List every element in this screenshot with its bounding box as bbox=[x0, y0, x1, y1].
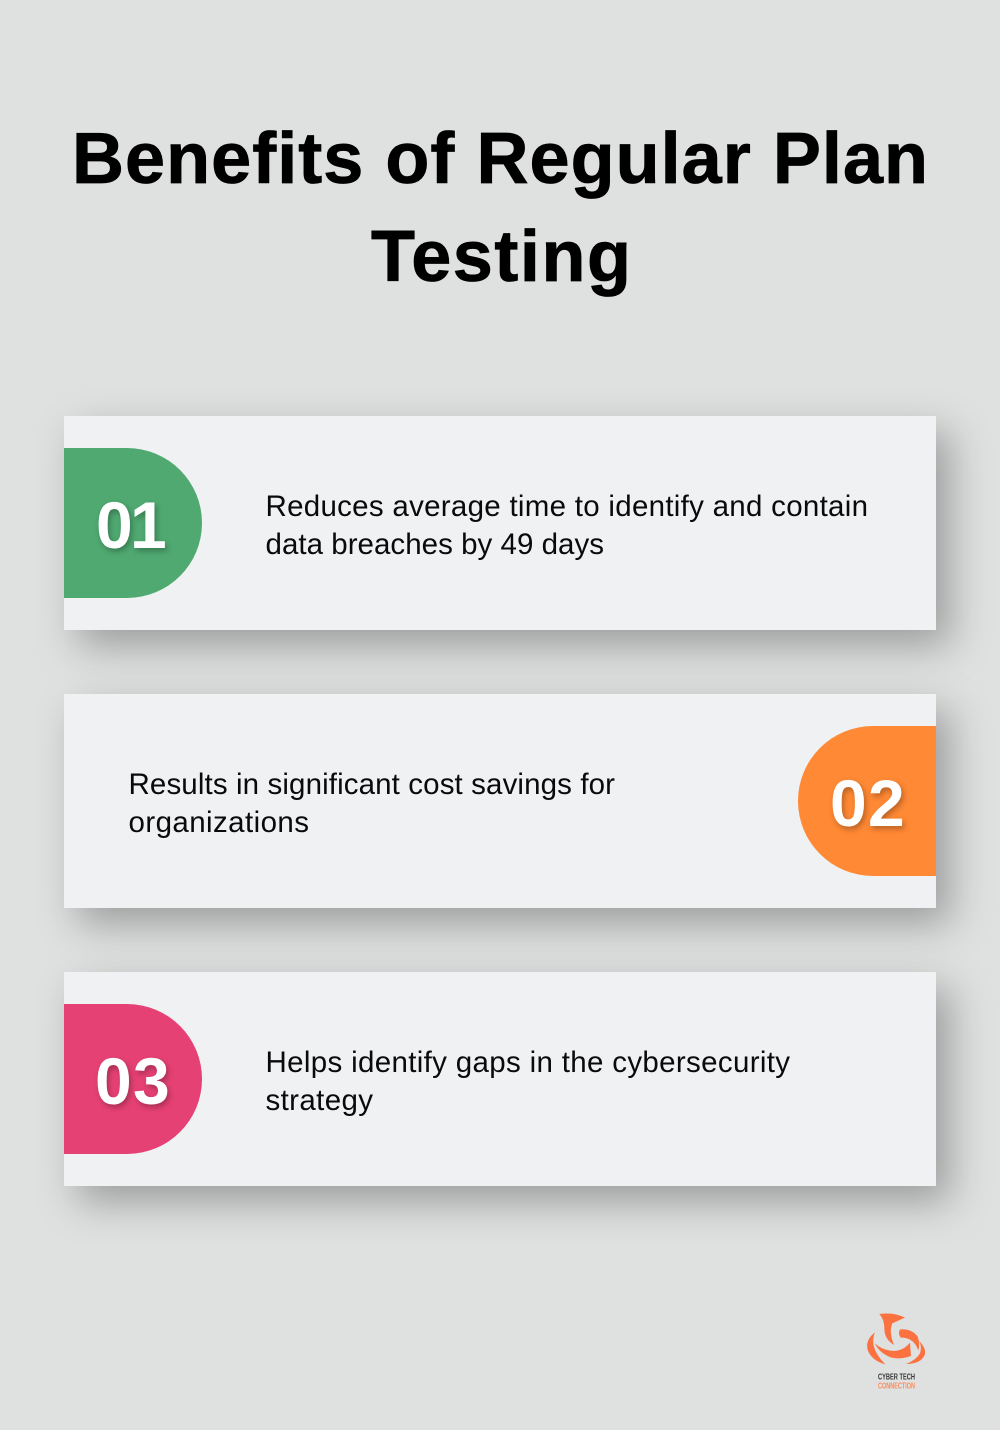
number badge 02 bbox=[798, 726, 936, 876]
panel: benefit 01 bbox=[64, 416, 936, 630]
logo wordmark: CONNECTION bbox=[878, 1382, 915, 1390]
title: Benefits of Regular Plan bbox=[72, 119, 928, 199]
benefit text 03: strategy bbox=[266, 1084, 373, 1117]
number badge 03 bbox=[64, 1004, 202, 1154]
title bbox=[72, 119, 928, 297]
benefit text 02: Results in significant cost savings for bbox=[128, 768, 615, 801]
number badge 02: 02 bbox=[830, 766, 905, 840]
logo wordmark bbox=[878, 1372, 915, 1390]
benefit text 03: Helps identify gaps in the cybersecurity bbox=[266, 1046, 790, 1079]
number badge 01: 01 bbox=[96, 488, 167, 562]
benefit text 01 bbox=[266, 490, 868, 561]
number badge 03: 03 bbox=[95, 1044, 170, 1118]
panel: benefit 02 bbox=[64, 694, 936, 908]
benefit text 01: data breaches by 49 days bbox=[266, 528, 604, 561]
benefit text 02 bbox=[128, 768, 615, 839]
benefit text 02: organizations bbox=[128, 806, 309, 839]
panel: benefit 03 bbox=[64, 972, 936, 1186]
card background 01 bbox=[64, 416, 936, 630]
number badge 01 bbox=[64, 448, 202, 598]
card background 03 bbox=[64, 972, 936, 1186]
benefit text 01: Reduces average time to identify and contain bbox=[266, 490, 868, 523]
benefit text 03 bbox=[266, 1046, 790, 1117]
logo wordmark: CYBER TECH bbox=[878, 1372, 915, 1382]
icon: Cyber Tech Connection logo bbox=[867, 1313, 925, 1390]
card background 02 bbox=[64, 694, 936, 908]
title: Testing bbox=[371, 217, 631, 297]
